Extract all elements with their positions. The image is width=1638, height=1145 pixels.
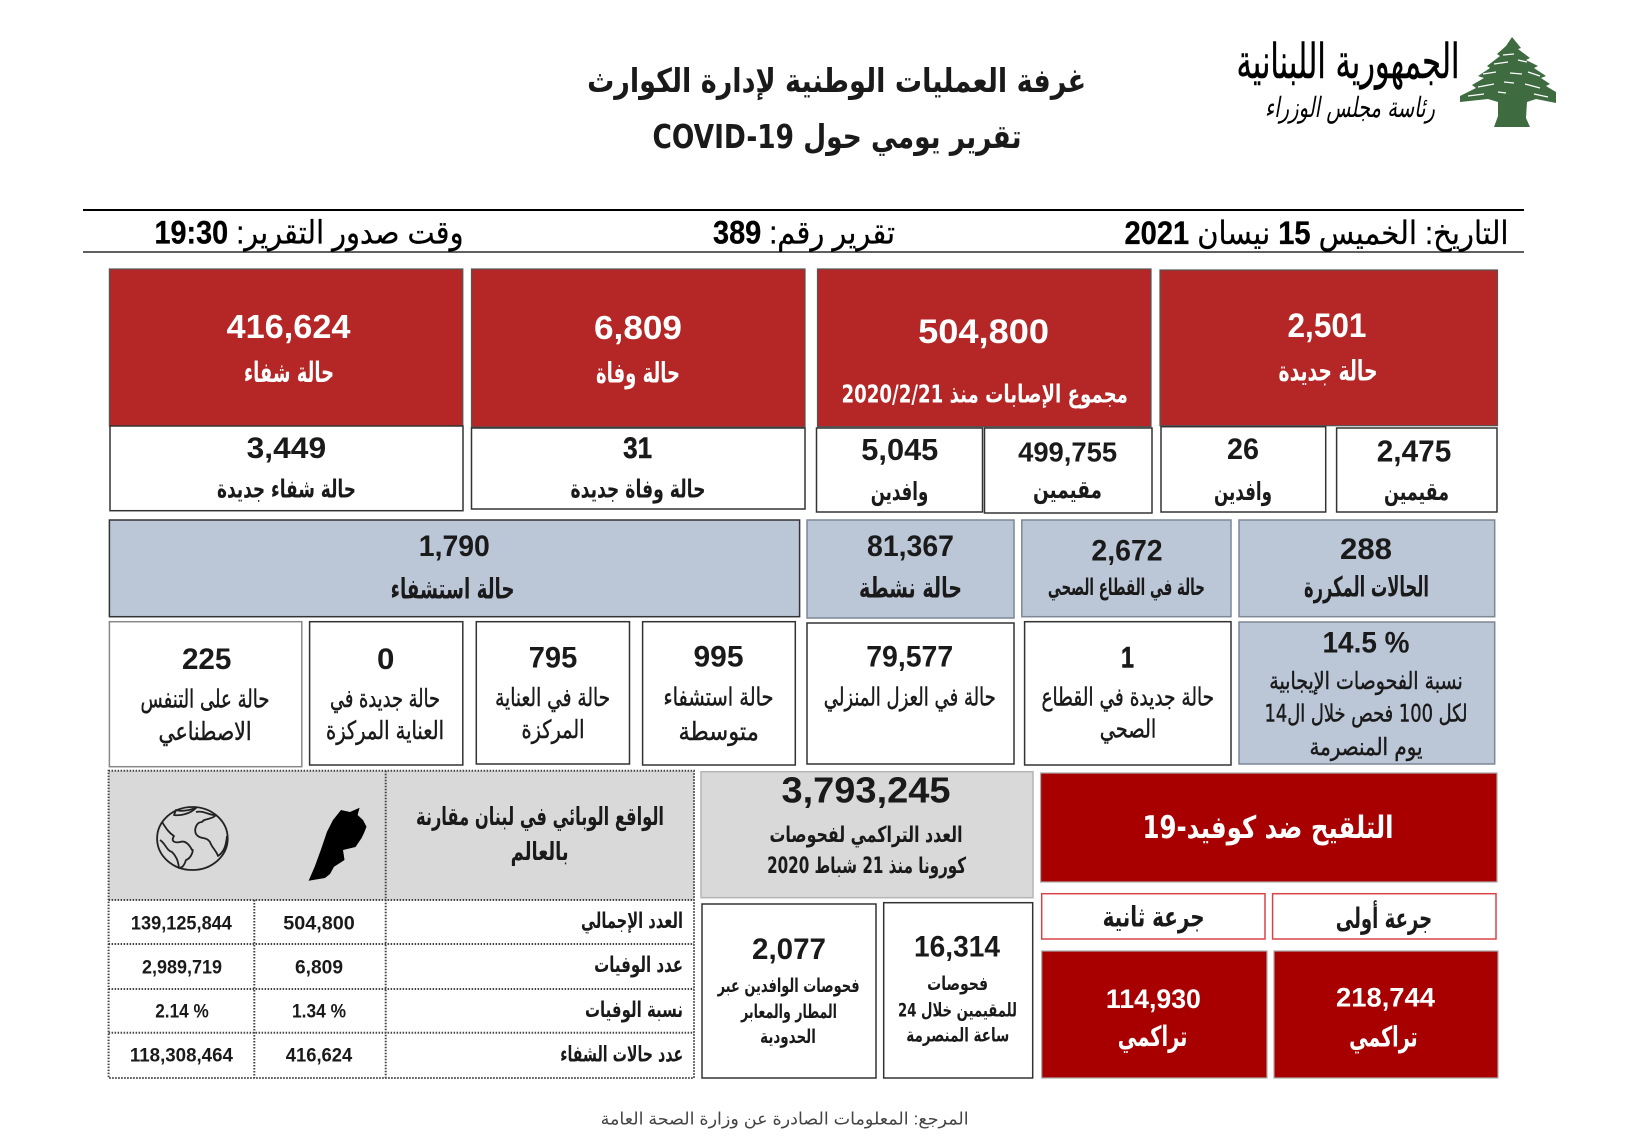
report time: وقت صدور التقرير: 19:30 [154, 214, 464, 252]
number: total recoveries: 416,624 [226, 308, 351, 345]
label: new recoveries: حالة شفاء جديدة [217, 475, 356, 504]
number: total arrivals: 5,045 [861, 432, 938, 467]
row: death rate: 1.34 % [292, 1002, 346, 1023]
number: total residents: 499,755 [1018, 437, 1117, 468]
panel: arrival tests: المطار والمعابر [740, 1001, 837, 1023]
row: deaths [142, 953, 683, 978]
row: recoveries: 416,624 [286, 1046, 353, 1067]
number: active cases: 81,367 [867, 530, 954, 563]
label: cumulative: تراكمي [1349, 1021, 1418, 1054]
panel: repeated cases [1239, 520, 1495, 617]
number: new deaths: 31 [623, 432, 652, 465]
heading: daily report: تقرير يومي حول COVID-19 [652, 117, 1021, 157]
label: ICU cases: حالة في العناية [495, 683, 610, 712]
number: second dose: 114,930 [1106, 984, 1201, 1014]
panel: health sector cases [1022, 520, 1231, 617]
row: deaths: 6,809 [295, 957, 343, 978]
number: new cases: 2,501 [1288, 307, 1366, 345]
label: new ICU cases: حالة جديدة في [330, 684, 440, 713]
number: total cases: 504,800 [918, 313, 1049, 351]
label: recoveries: حالة شفاء [244, 356, 334, 389]
panel: active cases [807, 520, 1014, 618]
panel: hospitalised [109, 520, 800, 617]
number: health sector cases: 2,672 [1091, 535, 1163, 568]
panel: first dose cumulative [1274, 951, 1498, 1078]
panel: ICU cases [476, 622, 630, 764]
panel: new ICU cases: العناية المركزة [326, 716, 444, 745]
label: hospitalised: حالة استشفاء [391, 572, 515, 605]
number: total deaths: 6,809 [594, 309, 682, 346]
panel: vaccination heading [1041, 773, 1497, 882]
panel: deaths [472, 269, 805, 509]
heading: national operations room: غرفة العمليات الوطنية لإدارة الكوارث [587, 61, 1086, 101]
icon: map of Lebanon [309, 808, 366, 881]
panel: moderate hospital cases [643, 622, 795, 765]
number: cumulative tests: 3,793,245 [782, 770, 950, 811]
row: total: 504,800 [283, 913, 355, 934]
number: new recoveries: 3,449 [247, 432, 326, 465]
number: ICU cases: 795 [529, 642, 577, 675]
wordmark: Presidency of the Council of Ministers: رئاسة مجلس الوزراء [1265, 91, 1435, 124]
panel: home isolation [807, 623, 1014, 764]
panel: test positivity: يوم المنصرمة [1310, 733, 1422, 761]
panel: Lebanon compared with the world table [109, 771, 694, 1078]
panel: arrival tests: الحدودية [760, 1026, 816, 1048]
panel: new cases [1160, 270, 1498, 512]
label: deaths: حالة وفاة [596, 357, 680, 390]
label: cumulative tests: العدد التراكمي لفحوصات [770, 823, 962, 848]
panel: second dose heading [1042, 894, 1265, 939]
panel: first dose heading: جرعة أولى [1336, 900, 1432, 935]
panel: resident tests: للمقيمين خلال 24 [898, 1000, 1017, 1022]
label: positivity rate: نسبة الفحوصات الإيجابية [1269, 667, 1463, 695]
label: total cases since date: مجموع الإصابات منذ 2020/2/21 [841, 379, 1128, 409]
row: total [131, 909, 683, 934]
table heading: الواقع الوبائي في لبنان مقارنة [416, 802, 664, 832]
label: active cases: حالة نشطة [859, 572, 962, 605]
label: new health sector case: حالة جديدة في القطاع [1041, 683, 1214, 712]
panel: new ICU cases [310, 622, 463, 765]
number: arrival tests: 2,077 [752, 933, 826, 966]
label: health sector cases: حالة في القطاع الصحي [1048, 575, 1205, 601]
panel: first dose heading [1273, 894, 1496, 939]
label: arrivals: وافدين [1214, 477, 1272, 507]
panel: test positivity: لكل 100 فحص خلال ال14 [1264, 700, 1468, 728]
panel: vaccination heading: التلقيح ضد كوفيد-19 [1142, 810, 1394, 846]
label: new cases: حالة جديدة [1278, 355, 1378, 388]
number: first dose: 218,744 [1336, 983, 1435, 1013]
report number: تقرير رقم: 389 [713, 214, 895, 252]
source note: المرجع: المعلومات الصادرة عن وزارة الصحة العامة [601, 1110, 969, 1130]
number: new residents: 2,475 [1377, 434, 1451, 469]
panel: cumulative tests [701, 770, 1033, 898]
row: total: 139,125,844 [131, 913, 232, 934]
table heading: بالعالم [511, 837, 569, 866]
panel: recoveries [109, 269, 463, 511]
panel: ventilated: الاصطناعي [158, 717, 252, 746]
label: resident tests: فحوصات [927, 973, 988, 995]
number: new ICU cases: 0 [377, 643, 394, 676]
number: repeated cases: 288 [1340, 533, 1392, 566]
panel: total cases [816, 269, 1152, 513]
number: positivity rate: 14.5 % [1322, 627, 1410, 660]
label: home isolation: حالة في العزل المنزلي [824, 683, 996, 712]
row: recoveries: عدد حالات الشفاء [560, 1043, 683, 1068]
row: deaths: 2,989,719 [142, 957, 222, 978]
table heading [416, 802, 664, 866]
label: residents: مقيمين [1384, 477, 1449, 507]
number: home isolation: 79,577 [866, 641, 953, 674]
row: death rate: 2.14 % [155, 1002, 209, 1023]
report info bar [154, 214, 1508, 252]
logo: Lebanese cedar and presidency of the council of ministers [1236, 34, 1556, 127]
panel: arrival tests [702, 904, 876, 1078]
number: new health sector case: 1 [1121, 642, 1134, 675]
panel: new health sector case: الصحي [1100, 715, 1156, 744]
panel: test positivity [1239, 622, 1495, 764]
row: total: العدد الإجمالي [581, 909, 683, 934]
label: residents: مقيمين [1033, 475, 1102, 505]
panel: new health sector case [1025, 622, 1231, 765]
icon: cedar tree [1460, 37, 1556, 127]
row: death rate [155, 998, 683, 1023]
label: arrival tests: فحوصات الوافدين عبر [717, 975, 860, 997]
panel: second dose heading: جرعة ثانية [1103, 901, 1205, 934]
panel: moderate hospital cases: متوسطة [678, 717, 759, 746]
panel: cumulative tests: كورونا منذ 21 شباط 2020 [767, 854, 966, 879]
number: resident tests: 16,314 [914, 931, 1000, 964]
panel: resident tests: ساعة المنصرمة [906, 1025, 1009, 1047]
number: ventilated: 225 [182, 643, 231, 676]
label: moderate cases: حالة استشفاء [664, 683, 774, 712]
panel: ICU cases: المركزة [522, 715, 584, 744]
label: new deaths: حالة وفاة جديدة [570, 475, 706, 505]
label: repeated cases: الحالات المكررة [1304, 571, 1429, 604]
number: new arrivals: 26 [1227, 433, 1259, 466]
row: death rate: نسبة الوفيات [585, 998, 683, 1023]
panel: resident tests [884, 903, 1033, 1078]
wordmark: Lebanese Republic: الجمهورية اللبنانية [1236, 34, 1460, 90]
number: moderate cases: 995 [694, 641, 744, 674]
title [587, 61, 1086, 157]
label: ventilated: حالة على التنفس [140, 685, 270, 714]
number: hospitalised: 1,790 [419, 530, 490, 563]
date: التاريخ: الخميس 15 نيسان 2021 [1124, 215, 1508, 252]
row: deaths: عدد الوفيات [594, 953, 683, 978]
panel: ventilated [109, 622, 302, 767]
panel: second dose cumulative [1042, 951, 1267, 1078]
label: arrivals: وافدين [871, 477, 928, 507]
row: recoveries: 118,308,464 [130, 1046, 233, 1067]
label: cumulative: تراكمي [1118, 1020, 1187, 1053]
icon: globe [157, 807, 228, 870]
row: recoveries [130, 1043, 683, 1068]
